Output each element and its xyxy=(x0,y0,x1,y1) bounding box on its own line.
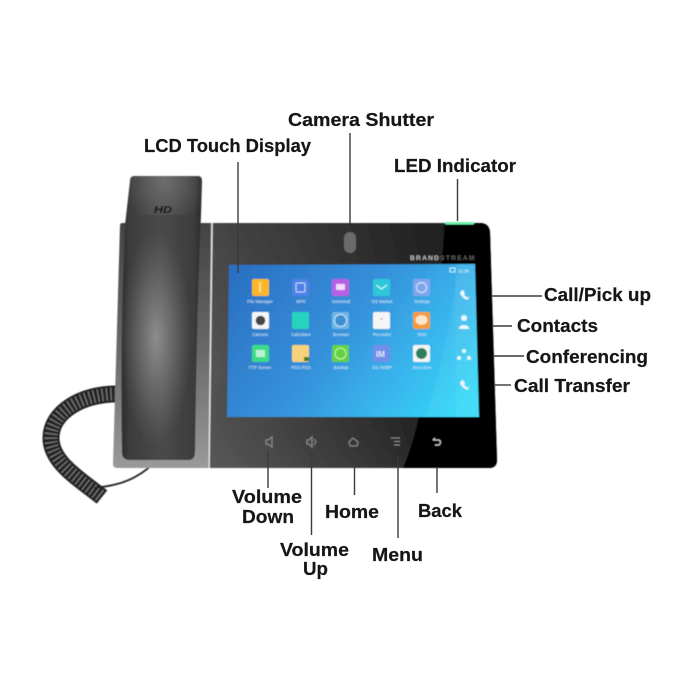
touch screen xyxy=(227,264,479,417)
phone body panel xyxy=(208,223,497,468)
row two apps: SMS xyxy=(417,332,427,337)
icon: conferencing xyxy=(457,349,471,360)
brand wordmark: BRANDSTREAM xyxy=(410,255,475,262)
label: LED Indicator xyxy=(394,155,516,221)
label: Home: Home xyxy=(325,501,379,522)
icon: volume down xyxy=(266,437,272,447)
label: Call Transfer: Call Transfer xyxy=(514,375,630,396)
label: LED Indicator: LED Indicator xyxy=(394,155,516,176)
row two apps xyxy=(252,312,430,337)
label: Volume Down xyxy=(232,451,302,527)
row one apps: Settings xyxy=(414,299,431,304)
icon: menu xyxy=(391,438,400,445)
row three apps: RSS RSS xyxy=(291,365,311,370)
row one apps: Voicemail xyxy=(332,299,350,304)
label: Conferencing: Conferencing xyxy=(526,346,648,367)
HD logo: HD xyxy=(154,205,172,216)
row one apps xyxy=(247,279,431,304)
label: Volume Down: Volume xyxy=(232,486,302,507)
phone xyxy=(51,176,497,497)
row three apps: Detection xyxy=(413,365,432,370)
coiled handset cord xyxy=(51,394,157,497)
label: Back xyxy=(418,467,463,521)
label: Volume Up: Up xyxy=(303,558,328,579)
label: Call/Pick up: Call/Pick up xyxy=(544,284,651,305)
icon: call xyxy=(460,290,469,300)
icon: volume up xyxy=(307,437,316,447)
status bar xyxy=(450,268,469,274)
label: Back: Back xyxy=(418,500,463,521)
row one apps: File Manager xyxy=(247,299,273,304)
side softkey icons xyxy=(457,290,471,390)
LED indicator xyxy=(445,222,474,224)
row two apps: Camera xyxy=(252,332,268,337)
label: Volume Up: Volume xyxy=(280,539,349,560)
label: Volume Down: Down xyxy=(242,506,294,527)
status bar: 11:36 xyxy=(458,268,469,274)
icon: contacts xyxy=(459,315,469,329)
label: Volume Up xyxy=(280,450,349,579)
row three apps xyxy=(249,345,432,370)
icon: back xyxy=(433,438,440,445)
row two apps: Recorder xyxy=(373,332,392,337)
row one apps: GS Market xyxy=(372,299,393,304)
handset xyxy=(121,176,202,460)
row three apps: IM xyxy=(376,350,385,359)
label: LCD Touch Display: LCD Touch Display xyxy=(144,135,312,156)
silver trim line xyxy=(209,223,212,468)
label: Menu: Menu xyxy=(372,544,423,565)
label: Menu xyxy=(372,456,423,565)
black glare region xyxy=(403,223,497,468)
label: Camera Shutter: Camera Shutter xyxy=(288,109,434,130)
row three apps: GS XMBP xyxy=(372,365,392,370)
icon: call transfer xyxy=(460,380,469,390)
phone base left section xyxy=(113,223,214,468)
row three apps: Backup xyxy=(334,365,349,370)
icon: home xyxy=(349,438,358,446)
bottom touch buttons xyxy=(266,437,440,447)
row two apps: Browser xyxy=(333,332,350,337)
label: Home xyxy=(325,450,379,522)
app grid xyxy=(247,279,432,370)
row one apps: MPK xyxy=(296,299,306,304)
row three apps: FTP Server xyxy=(249,365,272,370)
label: Contacts: Contacts xyxy=(517,315,598,336)
row two apps: Calculator xyxy=(291,332,311,337)
camera shutter xyxy=(344,232,356,253)
